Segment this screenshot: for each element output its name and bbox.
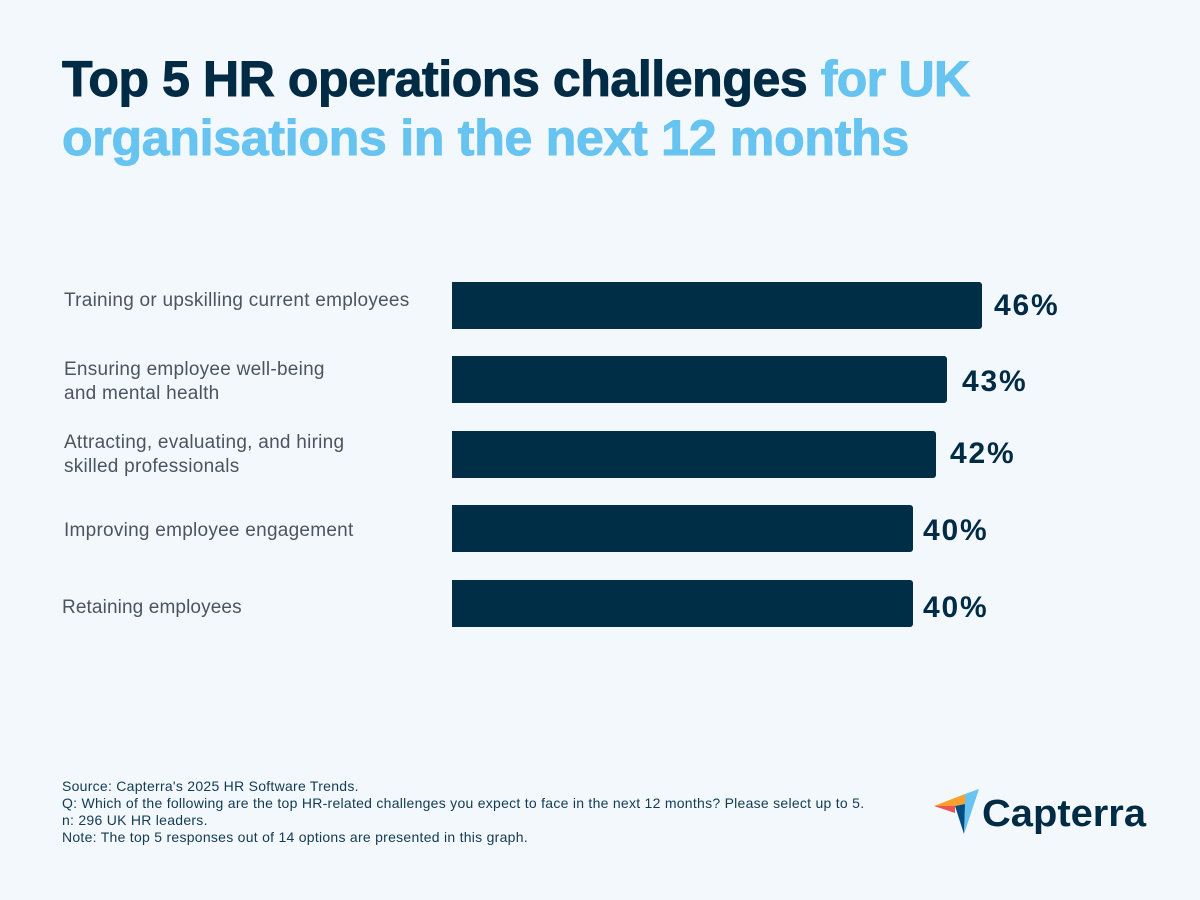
value: 43%: 43% [962, 365, 1027, 398]
source note: n: 296 UK HR leaders. [62, 812, 208, 828]
label: hiring: Attracting, evaluating, and hiring [64, 432, 344, 453]
source note: Q: Which of the following are the top HR-related challenges you expect to face in the next 12 months? Please select up to 5. [62, 795, 864, 811]
wordmark: Capterra [982, 793, 1147, 835]
value: 42%: 42% [950, 437, 1015, 470]
value: 40%: 40% [923, 591, 988, 624]
label: engagement: Improving employee engagement [64, 520, 354, 541]
label: well-being [64, 359, 325, 404]
bar: training [452, 282, 982, 329]
bar chart [62, 282, 1059, 627]
source note: Source: Capterra's 2025 HR Software Trends. [62, 778, 359, 794]
bar: well-being [452, 356, 947, 403]
label: training: Training or upskilling current employees [64, 290, 410, 311]
label: hiring [64, 432, 344, 477]
title [62, 51, 971, 166]
icon: Capterra arrow [934, 789, 979, 834]
value: 46%: 46% [994, 289, 1059, 322]
source note: Note: The top 5 responses out of 14 options are presented in this graph. [62, 829, 528, 845]
label: hiring: skilled professionals [64, 456, 240, 477]
title: organisations in the next 12 months [62, 110, 909, 166]
label: well-being: and mental health [64, 383, 219, 404]
title: Top 5 HR operations challenges for UK [62, 51, 969, 107]
logo: Capterra [934, 789, 1147, 835]
bar: hiring [452, 431, 936, 478]
value: 40%: 40% [923, 514, 988, 547]
bar: engagement [452, 505, 913, 552]
bar: retaining [452, 580, 913, 627]
source note [62, 778, 864, 845]
label: retaining: Retaining employees [62, 597, 242, 618]
label: well-being: Ensuring employee well-being [64, 359, 325, 380]
